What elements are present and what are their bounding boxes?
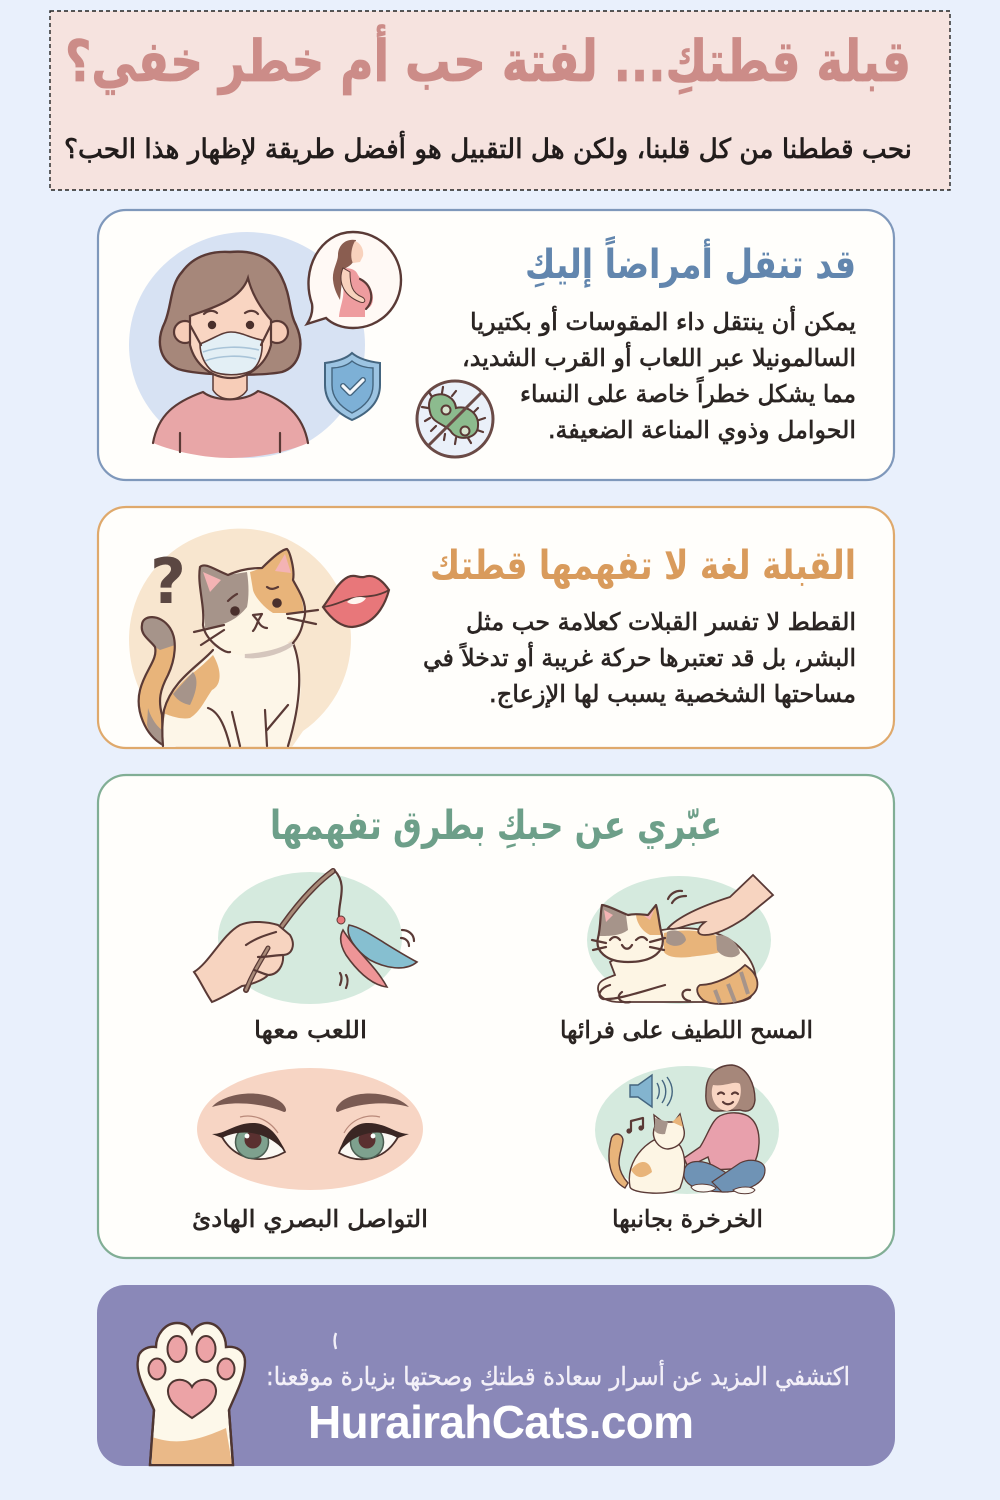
panel: cat language xyxy=(98,507,894,748)
label: play: اللعب معها xyxy=(254,1016,367,1044)
text: diseases: السالمونيلا عبر اللعاب أو القرب الشديد، xyxy=(462,342,856,372)
icon: kissing lips xyxy=(323,576,389,627)
label: eye contact: التواصل البصري الهادئ xyxy=(192,1205,428,1233)
label: gentle petting: المسح اللطيف على فرائها xyxy=(560,1016,813,1044)
text: cat language xyxy=(423,608,856,708)
header panel xyxy=(50,11,950,190)
illustration: wand toy and hand xyxy=(194,871,417,1004)
text: cat language: مساحتها الشخصية يسبب لها الإزعاج. xyxy=(489,680,856,708)
text: diseases: مما يشكل خطراً خاصة على النساء xyxy=(520,377,856,408)
text: cat language: البشر، بل قد تعتبرها حركة غريبة أو تدخلاً في xyxy=(423,642,856,672)
panel: call to action xyxy=(97,1285,895,1466)
text: cat language: القطط لا تفسر القبلات كعلامة حب مثل xyxy=(466,608,856,636)
illustration: woman purring with cat xyxy=(595,1065,779,1194)
icon: shield xyxy=(325,353,380,420)
website url: HurairahCats.com xyxy=(308,1396,694,1448)
heading: ways to show love: عبّري عن حبكِ بطرق تفهمها xyxy=(270,803,722,849)
icon: speech bubble with pregnant woman xyxy=(307,232,401,328)
text: diseases xyxy=(462,306,856,444)
label: purring beside her: الخرخرة بجانبها xyxy=(612,1205,763,1233)
illustration: calm eyes xyxy=(197,1068,423,1190)
heading: cat language: القبلة لغة لا تفهمها قطتك xyxy=(430,543,856,589)
text: diseases: الحوامل وذوي المناعة الضعيفة. xyxy=(548,416,856,444)
panel: diseases xyxy=(98,210,894,480)
icon: cat paw xyxy=(138,1323,245,1465)
text: diseases: يمكن أن ينتقل داء المقوسات أو بكتيريا xyxy=(470,306,856,336)
item: play xyxy=(194,871,417,1044)
illustration: petting a cat xyxy=(587,875,773,1004)
decorative fragment mark xyxy=(334,1333,336,1349)
item: gentle petting xyxy=(560,875,813,1044)
intro text: نحب قططنا من كل قلبنا، ولكن هل التقبيل هو أفضل طريقة لإظهار هذا الحب؟ xyxy=(64,130,912,165)
call to action text: اكتشفي المزيد عن أسرار سعادة قطتكِ وصحتها بزيارة موقعنا: xyxy=(266,1359,850,1392)
heading: diseases: قد تنقل أمراضاً إليكِ xyxy=(525,235,856,288)
icon: crossed-out bacteria xyxy=(417,381,493,457)
panel: ways to show love xyxy=(98,775,894,1258)
item: eye contact xyxy=(192,1068,428,1233)
illustration: confused cat xyxy=(129,529,351,747)
illustration: masked woman xyxy=(129,232,365,458)
icon: question mark: ? xyxy=(150,545,186,618)
item: purring beside her xyxy=(595,1065,779,1233)
